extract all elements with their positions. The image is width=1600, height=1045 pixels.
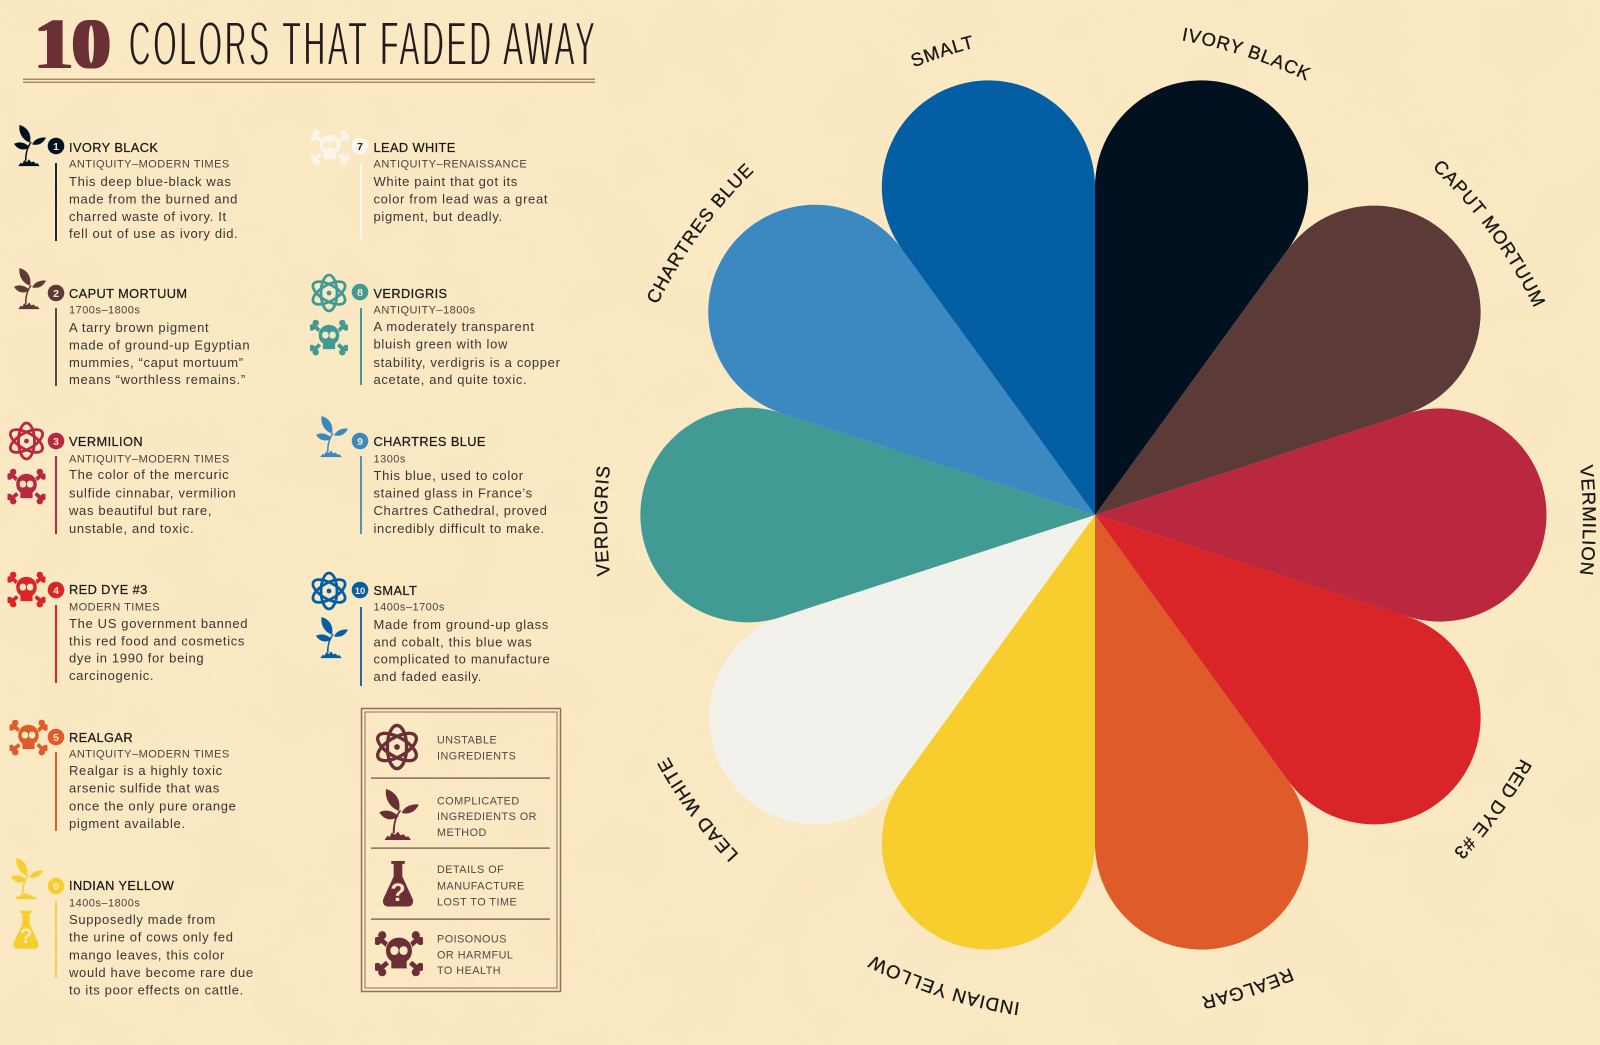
- item text: 1400s–1700s: [374, 602, 445, 614]
- item 10: smalt: [309, 573, 550, 686]
- item text: made of ground-up Egyptian: [69, 337, 250, 352]
- legend: complicated ingredients or method: METHOD: [437, 827, 487, 839]
- item text: RED DYE #3: [69, 582, 148, 597]
- item text: CHARTRES BLUE: [374, 434, 486, 449]
- icon: sprout: [316, 416, 348, 457]
- legend: complicated ingredients or method: INGREDIENTS OR: [437, 811, 537, 823]
- number badge: 8: [357, 287, 363, 299]
- icon: sprout: [14, 268, 46, 309]
- item text: once the only pure orange: [69, 799, 237, 814]
- title numeral 10: 10: [35, 4, 110, 84]
- item text: ANTIQUITY–MODERN TIMES: [69, 749, 230, 761]
- legend: details of manufacture lost to time: LOST TO TIME: [437, 897, 517, 909]
- wheel label: caput mortuum: CAPUT MORTUUM: [1435, 161, 1546, 307]
- item text: A moderately transparent: [374, 319, 535, 334]
- item text: Made from ground-up glass: [374, 617, 549, 632]
- item text: arsenic sulfide that was: [69, 780, 220, 795]
- item text: ANTIQUITY–1800s: [374, 305, 475, 317]
- number badge: 5: [53, 732, 59, 744]
- icon: atom: [309, 275, 349, 311]
- legend: details of manufacture lost to time: [383, 861, 525, 909]
- number badge: [48, 433, 64, 449]
- icon: atom: [309, 573, 349, 609]
- number badge: 7: [357, 141, 363, 153]
- color wheel: [640, 53, 1546, 977]
- icon: skull: [309, 320, 349, 355]
- wheel label: ivory black: IVORY BLACK: [1182, 28, 1312, 81]
- icon: sprout: [14, 125, 46, 166]
- item text: sulfide cinnabar, vermilion: [69, 485, 236, 500]
- number badge: 4: [53, 585, 59, 597]
- item text: [374, 140, 548, 224]
- item text: mummies, “caput mortuum”: [69, 355, 244, 370]
- item 1: ivory black: [14, 125, 238, 241]
- legend: poisonous or harmful to health: OR HARMFUL: [437, 950, 513, 962]
- petal: red dye #3: [1032, 429, 1523, 867]
- petal: lead white: [667, 429, 1158, 867]
- item text: stained glass in France’s: [374, 485, 533, 500]
- icon: skull: [310, 130, 350, 165]
- icon: flask: [13, 911, 39, 949]
- number badge: [48, 582, 64, 598]
- item text: [69, 730, 237, 831]
- icon: sprout: [316, 617, 348, 658]
- item text: The color of the mercuric: [69, 467, 229, 482]
- item 4: red dye #3: [6, 572, 248, 683]
- petal: chartres blue: [666, 162, 1158, 601]
- number badge: 2: [53, 288, 59, 300]
- item text: this red food and cosmetics: [69, 633, 245, 648]
- number badge: [352, 582, 368, 598]
- item text: mango leaves, this color: [69, 948, 225, 963]
- item text: stability, verdigris is a copper: [374, 355, 561, 370]
- item text: [68, 434, 236, 536]
- item text: CAPUT MORTUUM: [69, 286, 187, 301]
- item text: MODERN TIMES: [69, 602, 160, 614]
- number badge: 10: [355, 586, 365, 597]
- item text: This blue, used to color: [374, 468, 524, 483]
- legend: details of manufacture lost to time: DETAILS OF: [437, 864, 504, 876]
- legend panel: [362, 708, 560, 992]
- item text: ANTIQUITY–RENAISSANCE: [374, 158, 527, 170]
- item text: [374, 583, 550, 684]
- item text: carcinogenic.: [69, 668, 154, 683]
- number badge: [352, 138, 368, 154]
- icon: skull: [8, 720, 49, 755]
- item text: and cobalt, this blue was: [374, 634, 532, 649]
- item text: charred waste of ivory. It: [69, 209, 227, 224]
- legend: complicated ingredients or method: [379, 789, 537, 840]
- item text: 1400s–1800s: [69, 898, 140, 910]
- legend: poisonous or harmful to health: [373, 931, 513, 977]
- item text: INDIAN YELLOW: [69, 878, 175, 893]
- number badge: 1: [53, 141, 59, 153]
- number badge: [48, 285, 64, 301]
- item text: ANTIQUITY–MODERN TIMES: [69, 158, 230, 170]
- item text: IVORY BLACK: [69, 140, 158, 155]
- item text: SMALT: [374, 583, 417, 598]
- item text: [69, 140, 238, 241]
- number badge: 3: [53, 436, 59, 448]
- legend: details of manufacture lost to time: MANUFACTURE: [437, 880, 525, 892]
- item text: 1300s: [374, 454, 406, 466]
- item text: complicated to manufacture: [374, 652, 550, 667]
- item text: acetate, and quite toxic.: [374, 372, 527, 387]
- legend: poisonous or harmful to health: POISONOUS: [437, 933, 507, 945]
- wheel label: vermilion: VERMILION: [1580, 464, 1596, 574]
- item text: [69, 286, 250, 387]
- item text: would have become rare due: [68, 965, 254, 980]
- item text: was beautiful but rare,: [68, 503, 212, 518]
- item text: unstable, and toxic.: [69, 521, 194, 536]
- number badge: [48, 729, 64, 745]
- number badge: 6: [53, 881, 59, 893]
- title words: COLORS THAT FADED AWAY: [129, 10, 598, 79]
- item text: pigment, but deadly.: [374, 209, 503, 224]
- wheel label: smalt: SMALT: [911, 35, 972, 66]
- legend: unstable ingredients: INGREDIENTS: [437, 751, 516, 763]
- wheel label: verdigris: VERDIGRIS: [594, 466, 610, 577]
- item 5: realgar: [8, 720, 237, 831]
- item text: means “worthless remains.”: [69, 372, 246, 387]
- item 6: indian yellow: [11, 858, 254, 997]
- item text: incredibly difficult to make.: [374, 521, 545, 536]
- petal: smalt: [854, 53, 1196, 548]
- item text: ANTIQUITY–MODERN TIMES: [69, 454, 230, 466]
- number badge: [352, 284, 368, 300]
- item text: Realgar is a highly toxic: [69, 763, 223, 778]
- item text: pigment available.: [69, 816, 186, 831]
- number badge: [48, 878, 64, 894]
- item text: color from lead was a great: [374, 192, 548, 206]
- item text: VERMILION: [69, 434, 143, 449]
- item text: dye in 1990 for being: [69, 651, 204, 666]
- item text: bluish green with low: [374, 336, 508, 351]
- item text: 1700s–1800s: [69, 305, 140, 317]
- icon: skull: [6, 469, 47, 504]
- item text: [69, 582, 248, 683]
- item text: A tarry brown pigment: [69, 320, 209, 335]
- petal: ivory black: [994, 53, 1336, 548]
- item 3: vermilion: [6, 423, 236, 536]
- item text: and faded easily.: [374, 669, 482, 684]
- item text: to its poor effects on cattle.: [69, 982, 244, 997]
- legend: details of manufacture lost to time: ?: [390, 879, 406, 907]
- item text: the urine of cows only fed: [69, 929, 234, 944]
- legend: unstable ingredients: UNSTABLE: [437, 734, 497, 746]
- number badge: [48, 138, 64, 154]
- wheel label: red dye #3: RED DYE #3: [1455, 759, 1532, 858]
- item text: [68, 878, 254, 997]
- item text: [374, 286, 561, 387]
- wheel label: indian yellow: INDIAN YELLOW: [867, 956, 1019, 1016]
- item text: [374, 434, 547, 536]
- item 7: lead white: [310, 130, 548, 239]
- icon: atom: [7, 423, 46, 459]
- item text: This deep blue-black was: [69, 174, 232, 189]
- icon: flask: ?: [20, 925, 32, 948]
- wheel label: lead white: LEAD WHITE: [657, 757, 738, 862]
- petal: vermilion: [1095, 408, 1546, 622]
- item text: REALGAR: [69, 730, 133, 745]
- number badge: 9: [357, 436, 363, 448]
- item text: LEAD WHITE: [374, 140, 456, 155]
- petal: realgar: [994, 482, 1336, 977]
- item 2: caput mortuum: [14, 268, 250, 387]
- petal: caput mortuum: [1032, 163, 1523, 601]
- item text: White paint that got its: [374, 174, 518, 189]
- item text: The US government banned: [69, 616, 248, 631]
- item text: fell out of use as ivory did.: [69, 226, 238, 241]
- petal: verdigris: [640, 408, 1095, 622]
- item text: Chartres Cathedral, proved: [374, 503, 547, 518]
- icon: sprout: [11, 858, 43, 899]
- title: [35, 4, 598, 84]
- item text: made from the burned and: [69, 192, 238, 206]
- wheel label: realgar: REALGAR: [1202, 968, 1294, 1008]
- wheel label: chartres blue: CHARTRES BLUE: [648, 162, 754, 302]
- item text: VERDIGRIS: [374, 286, 448, 301]
- item 8: verdigris: [309, 275, 561, 387]
- number badge: [352, 433, 368, 449]
- petal: indian yellow: [854, 482, 1196, 977]
- icon: skull: [6, 572, 47, 607]
- item 9: chartres blue: [316, 416, 547, 536]
- legend: unstable ingredients: [373, 725, 516, 769]
- item text: Supposedly made from: [69, 912, 216, 927]
- legend: poisonous or harmful to health: TO HEALTH: [437, 965, 501, 977]
- legend: complicated ingredients or method: COMPLICATED: [437, 796, 520, 808]
